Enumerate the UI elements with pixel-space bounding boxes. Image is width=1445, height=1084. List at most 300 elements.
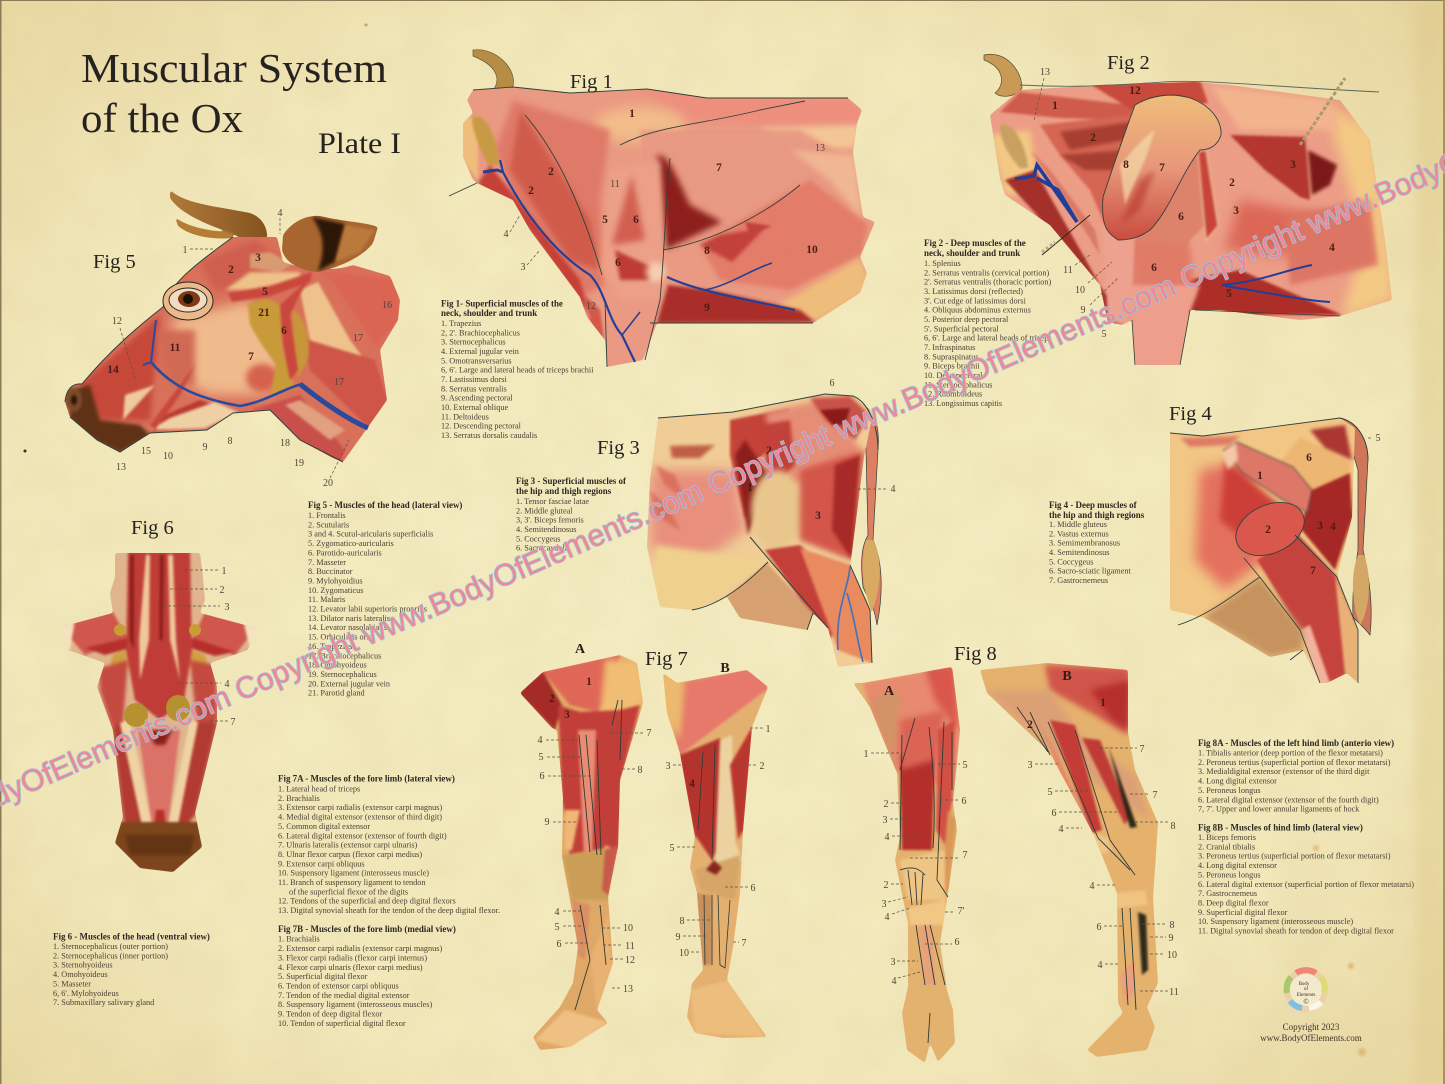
legend text: Fig 1: 7. Lastissimus dorsi: [441, 375, 507, 384]
legend text: Fig 8B: 8. Deep digital flexor: [1198, 898, 1269, 907]
figure 8: hind limb: [853, 643, 1179, 1063]
label: Fig 2: Fig 2: [1107, 52, 1150, 74]
figure 8 leader labels: 3: [882, 899, 886, 910]
legend text: Fig 5: Fig 5 - Muscles of the head (lateral view): [308, 500, 462, 510]
legend text: Fig 2: Fig 2 - Deep muscles of the: [924, 238, 1026, 248]
legend text: Fig 8A: 4. Long digital extensor: [1198, 777, 1277, 786]
figure 7 leader labels: 12: [625, 955, 635, 966]
legend text: Fig 1: 10. External oblique: [441, 403, 508, 412]
copyright text: [1260, 1022, 1362, 1043]
figure 4 labels: 3: [1317, 520, 1323, 532]
limb A painting: [520, 655, 645, 1050]
legend text: Fig 2: 2'. Serratus ventralis (thoracic portion): [924, 278, 1052, 287]
figure 5 labels: 8: [228, 436, 232, 447]
legend text: Fig 8B: 6. Lateral digital extensor (superficial portion of flexor metatarsi): [1198, 880, 1414, 889]
figure 8 leader labels: 10: [1167, 950, 1177, 961]
figure 2 labels: 8: [1123, 159, 1129, 171]
legend text: Fig 4: 3. Semimembranosus: [1049, 539, 1120, 548]
legend text: Fig 1: 3. Sternocephalicus: [441, 338, 506, 347]
figure 7 leader labels: 8: [638, 765, 642, 776]
label: Fig 6: Fig 6: [131, 517, 174, 539]
legend text: Fig 1: 11. Deltoideus: [441, 412, 489, 421]
legend text: Fig 8A: 2. Peroneus tertius (superficial portion of flexor metatarsi): [1198, 758, 1391, 767]
legend text: Fig 7A: Fig 7A - Muscles of the fore limb (lateral view): [278, 774, 455, 784]
figure 2 labels: 3: [1233, 205, 1239, 217]
labels: Fig 7, A, B: B: [720, 661, 730, 676]
legend text: Fig 7B: 5. Superficial digital flexor: [278, 972, 368, 981]
jugular vein: [143, 320, 368, 428]
legend text: Fig 5: 11. Malaris: [308, 595, 345, 604]
figure 3 labels: 1: [747, 482, 753, 494]
legend text: Fig 7A: 8. Ulnar flexor carpus (flexor carpi medius): [278, 850, 422, 859]
legend text: Fig 5: 18. Omohyoideus: [308, 661, 367, 670]
figure 7 leader labels: 8: [680, 916, 684, 927]
legend text: Fig 2: 3'. Cut edge of latissimus dorsi: [924, 296, 1027, 305]
legend text: Fig 1: Fig 1- Superficial muscles of the: [441, 298, 563, 308]
legend text: Fig 2: 11. Sternocephalicus: [924, 380, 992, 389]
legend text: Fig 2: 7. Infraspinatus: [924, 343, 975, 352]
labels: Fig 7, A, B: A: [575, 642, 586, 657]
figure 1 labels: 4: [504, 229, 508, 240]
legend text: Fig 2: 5. Posterior deep pectoral: [924, 315, 1009, 324]
legend text: Fig 5: 5. Zygomatico-auricularis: [308, 539, 394, 548]
figure 7 leader labels: 5: [670, 843, 674, 854]
legend text: Fig 2: 8. Supraspinatus: [924, 352, 979, 361]
figure 2 labels: 1: [1052, 100, 1058, 112]
muscle painting: [990, 80, 1395, 365]
figure 8 leader labels: 7': [958, 906, 965, 917]
label: Fig 3: Fig 3: [597, 437, 640, 459]
legend text: Fig 5: 1. Frontalis: [308, 511, 346, 520]
legend text: Fig 8A: 5. Peroneus longus: [1198, 786, 1261, 795]
figure 5 labels: 19: [294, 458, 304, 469]
legend text: Fig 8B: 3. Peroneus tertius (superficial portion of flexor metatarsi): [1198, 852, 1391, 861]
muscle painting: [60, 553, 258, 875]
logo: Body of Elements: ©: [1303, 998, 1309, 1006]
figure 7 leader labels: 13: [623, 984, 633, 995]
figure 8 leader labels: 4: [1090, 881, 1094, 892]
legend text: Fig 1: 8. Serratus ventralis: [441, 384, 507, 393]
legend text: Fig 2: 2. Serratus ventralis (cervical portion): [924, 268, 1050, 277]
legend text: Fig 7A: 6. Lateral digital extensor (extensor of fourth digit): [278, 831, 447, 840]
label: Fig 8: Fig 8: [954, 643, 997, 665]
figure 2 labels: 10: [1075, 285, 1085, 296]
figure 6 labels: 4: [224, 679, 230, 690]
legend text: Fig 4: the hip and thigh regions: [1049, 510, 1145, 520]
logo: Body of Elements: Body: [1299, 982, 1310, 987]
figure 7 leader labels: 11: [625, 941, 635, 952]
legend text: Fig 7B: Fig 7B - Muscles of the fore limb (medial view): [278, 924, 456, 934]
figure 8 leader labels: 1: [864, 749, 868, 760]
legend text: Fig 4: 4. Semitendinosus: [1049, 548, 1110, 557]
anatomy contour lines: [449, 87, 848, 367]
limb A: 2: [549, 693, 555, 705]
figure 4 labels: 5: [1376, 433, 1380, 444]
muscle painting: [463, 87, 875, 367]
figure 8 leader labels: 4: [1058, 824, 1064, 835]
legend text: Fig 2: 4. Obliquus abdominus externus: [924, 306, 1031, 315]
limb B: 2: [1027, 719, 1033, 731]
legend text: Fig 4: 2. Vastus externus: [1049, 529, 1109, 538]
figure 4 labels: 6: [1306, 452, 1312, 464]
legend text: Fig 8B: 4. Long digital extensor: [1198, 861, 1277, 870]
figure 8 leader labels: 6: [1052, 808, 1056, 819]
figure 8 leader labels: 5: [1048, 787, 1052, 798]
limb B: [980, 663, 1158, 1057]
legend text: Fig 5: 6. Parotido-auricularis: [308, 548, 382, 557]
muscle painting: [1170, 418, 1358, 683]
figure 7 leader labels: 9: [676, 932, 680, 943]
legend text: Fig 7A: 7. Ulnaris lateralis (extensor carpi ulnaris): [278, 841, 418, 850]
figure 7 leader labels: 6: [556, 939, 562, 950]
legend text: Fig 3: 1. Tensor fasciae latae: [516, 497, 589, 506]
legend text: Fig 5: 15. Orbicularis oris: [308, 633, 372, 642]
figure 8 leader labels: 11: [1169, 987, 1179, 998]
figure 1 labels: 7: [716, 162, 722, 174]
tail tuft: [1353, 555, 1369, 625]
shoulder blade: [1103, 95, 1221, 240]
horn: [473, 50, 513, 95]
legend text: Fig 5: 21. Parotid gland: [308, 689, 365, 698]
legend text: Fig 5: 8. Buccinator: [308, 567, 353, 576]
muscle 2: [1227, 492, 1313, 566]
label: Fig 5: Fig 5: [93, 251, 136, 273]
legend text: Fig 2: 5'. Superficial pectoral: [924, 324, 999, 333]
figure 7 leader labels: 4: [538, 735, 542, 746]
legend text: Fig 6: 5. Masseter: [53, 979, 91, 988]
legend text: Fig 7A: 3. Extensor carpi radialis (extensor carpi magnus): [278, 803, 443, 812]
legend text: Fig 1: 1. Trapezius: [441, 319, 481, 328]
figure 2 labels: 4: [1329, 242, 1335, 254]
figure 4 labels: 4: [1330, 521, 1336, 533]
figure 8 leader labels: 4: [884, 832, 890, 843]
figure 2 labels: 12: [1129, 85, 1141, 97]
figure 5 labels: 20: [323, 478, 333, 489]
figure 1 labels: [504, 108, 825, 314]
figure 5 labels: 3: [255, 252, 261, 264]
legend text: Fig 6: 3. Sternohyoideus: [53, 961, 113, 970]
figure 4 labels: [1257, 433, 1380, 577]
legend text: Fig 3: 3, 3'. Biceps femoris: [516, 516, 584, 525]
figure 8 leader labels: 7: [1140, 744, 1144, 755]
figure 5 labels: 6: [281, 325, 287, 337]
figure 3 labels: [747, 378, 896, 522]
figure 5 labels: 14: [107, 364, 119, 376]
figure 7 leader labels: [538, 724, 770, 995]
figure 1 labels: 3: [520, 262, 526, 273]
figure 8 leader labels: 4: [892, 976, 896, 987]
legend text: Fig 7A: 10. Suspensory ligament (interosseus muscle): [278, 869, 429, 878]
figure 7 leader labels: 7: [742, 938, 746, 949]
figure 5 labels: 7: [248, 351, 254, 363]
legend text: Fig 8A: 1. Tibialis anterior (deep portion of the flexor metatarsi): [1198, 748, 1383, 758]
figure 4: deep muscles of hip and thigh: [1169, 403, 1380, 683]
legend text: Fig 8A: 3. Medialdigital extensor (extensor of the third digit: [1198, 767, 1370, 776]
legend text: Fig 7B: 3. Flexor carpi radialis (flexor carpi internus): [278, 953, 427, 962]
legend text: Fig 6: 2. Sternocephalicus (inner portion): [53, 951, 168, 960]
figure 2 labels: 6: [1151, 262, 1157, 274]
figure 3 labels: 4: [890, 484, 896, 495]
figure 2 labels: 2: [1229, 177, 1235, 189]
figure 5: head lateral view: [65, 190, 400, 489]
legend text: Fig 5: 13. Dilator naris lateralis: [308, 614, 390, 623]
figure 1 labels: 12: [586, 301, 596, 312]
horn: [984, 54, 1022, 96]
legend text: Fig 5: 20. External jugular vein: [308, 679, 390, 688]
figure 1 labels: 5: [602, 214, 608, 226]
legend text: Fig 8B: Fig 8B - Muscles of hind limb (lateral view): [1198, 822, 1363, 832]
legend text: Fig 2: 12. Rhomboideus: [924, 390, 982, 399]
legend text: Fig 4: 1. Middle gluteus: [1049, 520, 1107, 529]
legend text: Fig 3: 2. Middle gluteal: [516, 506, 573, 515]
legend text: Fig 1: neck, shoulder and trunk: [441, 308, 537, 318]
figure 1 labels: 2: [548, 166, 554, 178]
figure 8 leader labels: 3: [1028, 760, 1032, 771]
limb A: 3: [564, 709, 570, 721]
figure 8 leader labels: [864, 744, 1179, 998]
figure 5 labels: 4: [278, 208, 282, 219]
legend text: Fig 5: 7. Masseter: [308, 558, 346, 567]
legend text: Fig 7A: 12. Tendons of the superficial and deep digital flexors: [278, 897, 456, 906]
figure 8 leader labels: 7: [962, 850, 968, 861]
limb B: 4: [689, 778, 695, 790]
figure 7 leader labels: 5: [538, 752, 544, 763]
legend text: Fig 5: 14. Levator nasolabialis: [308, 623, 387, 632]
title: Muscular System: [81, 45, 387, 91]
figure 1: superficial muscles of neck, shoulder and trunk: [449, 50, 875, 367]
legend text: Fig 7B: 10. Tendon of superficial digital flexor: [278, 1019, 406, 1028]
figure 6 labels: 3: [224, 602, 230, 613]
horns: [170, 190, 267, 241]
legend text: Fig 5: 16. Trapezius: [308, 642, 352, 651]
figure 8 leader labels: 6: [954, 937, 960, 948]
legend text: Fig 3: 4. Semitendinosus: [516, 525, 577, 534]
figure 5 labels: 2: [228, 264, 234, 276]
salivary glands: [114, 624, 201, 727]
legend text: Fig 2: 10. Deep pectoral: [924, 371, 983, 380]
tail: [1340, 418, 1371, 635]
label: Fig 4: Fig 4: [1169, 403, 1212, 425]
legend text: Fig 5: 3 and 4. Scutul-aricularis superficialis: [308, 530, 433, 539]
head muscle painting: [65, 237, 400, 462]
figure 4 labels: 1: [1257, 470, 1263, 482]
figure 5 labels: 18: [280, 438, 290, 449]
legend text: Fig 8B: 5. Peroneus longus: [1198, 870, 1261, 879]
tail: [862, 405, 881, 625]
legend text: Fig 6: Fig 6 - Muscles of the head (ventral view): [53, 932, 210, 942]
legend text: Fig 5: 2. Scutularis: [308, 520, 349, 529]
figure 4 labels: 2: [1265, 524, 1271, 536]
legend text: Fig 2: 9. Biceps brachii: [924, 362, 980, 371]
legend text: Fig 2: 6, 6'. Large and lateral heads of triceps: [924, 334, 1052, 343]
legend text: Fig 5: 10. Zygomaticus: [308, 586, 363, 595]
legend text: Fig 3: 6. Sacrocaudalis: [516, 544, 570, 553]
figure 1 labels: 11: [610, 179, 620, 190]
figure 7 leader labels: 9: [544, 817, 550, 828]
figure 5 labels: 10: [163, 451, 173, 462]
legend text: Fig 6: 4. Omohyoideus: [53, 970, 108, 979]
figure 5 labels: 15: [141, 446, 151, 457]
figure 2: deep muscles of neck, shoulder and trunk: [984, 52, 1395, 365]
legend text: Fig 4: 5. Coccygeus: [1049, 557, 1093, 566]
figure 2 labels: 5: [1102, 329, 1106, 340]
legend text: Fig 6: 7. Submaxillary salivary gland: [53, 998, 155, 1007]
title: [81, 45, 401, 160]
figure 1 labels: 6: [633, 214, 639, 226]
legend text: Fig 2: 3. Latissimus dorsi (reflected): [924, 287, 1023, 296]
figure 8 leader labels: 3: [882, 815, 888, 826]
tail tuft: [863, 540, 880, 612]
figure 5 labels: 16: [382, 300, 392, 311]
ear: [282, 216, 378, 272]
limb A painting: [853, 665, 960, 1063]
figure 8 leader labels: 8: [1170, 920, 1174, 931]
figure 7 leader labels: 10: [679, 948, 689, 959]
logo: Body of Elements: Elements: [1297, 993, 1315, 998]
legend text: Fig 5: 9. Mylohyoidius: [308, 576, 363, 585]
figure 8 leader labels: 3: [890, 957, 896, 968]
limb B: 1: [1100, 697, 1106, 709]
eye: [163, 282, 213, 320]
legend text: Fig 8A: 6. Lateral digital extensor (extensor of the fourth digit): [1198, 795, 1379, 804]
figure 2 labels: 13: [1040, 67, 1050, 78]
labels: Fig 7, A, B: [575, 642, 730, 676]
copyright text: www.BodyOfElements.com: [1260, 1033, 1362, 1043]
legend text: Fig 2: neck, shoulder and trunk: [924, 248, 1020, 258]
figure 1 labels: 13: [815, 143, 825, 154]
figure 7 leader labels: 5: [554, 922, 560, 933]
figure 3 labels: 3: [815, 510, 821, 522]
limb A: 1: [586, 676, 592, 688]
legend text: Fig 7B: 7. Tendon of the medial digital extensor: [278, 991, 410, 1000]
lines and veins: [1015, 78, 1379, 365]
legend text: Fig 6: 1. Sternocephalicus (outer portion): [53, 942, 168, 951]
limb B painting: [980, 663, 1158, 1057]
logo: Body of Elements: of: [1304, 987, 1308, 992]
figure 1 labels: 10: [806, 244, 818, 256]
figure 3: superficial muscles of hip and thigh: [597, 378, 896, 667]
vein: [838, 567, 863, 662]
legend text: Fig 3: the hip and thigh regions: [516, 486, 612, 496]
muscle painting: [647, 394, 873, 667]
legend text: Fig 7B: 2. Extensor carpi radialis (extensor carpi magnus): [278, 944, 443, 953]
legend text: Fig 1: 4. External jugular vein: [441, 347, 519, 356]
legend text: Fig 7B: 8. Suspensory ligament (interosseous muscles): [278, 1000, 432, 1009]
figure 6 labels: 1: [222, 566, 226, 577]
legend text: Fig 8A: Fig 8A - Muscles of the left hind limb (anterio view): [1198, 738, 1394, 748]
title: Plate I: [318, 127, 401, 160]
figure 4 labels: 7: [1310, 565, 1316, 577]
figure 7 leader labels: 2: [760, 761, 764, 772]
legend text: Fig 1: 13. Serratus dorsalis caudalis: [441, 431, 537, 440]
legend text: Fig 7A: of the superficial flexor of the digits: [289, 887, 408, 896]
figure 8 leader labels: 4: [884, 912, 890, 923]
legend text: Fig 5: 19. Sternocephalicus: [308, 670, 377, 679]
figure 6 labels: 2: [220, 585, 224, 596]
figure 8 leader labels: 8: [1170, 821, 1176, 832]
legend text: Fig 4: Fig 4 - Deep muscles of: [1049, 500, 1138, 510]
limb A: A: [884, 684, 895, 699]
legend text: Fig 2: 1. Splenius: [924, 259, 961, 268]
legend text: Fig 3: 5. Coccygeus: [516, 534, 560, 543]
logo: Body of Elements: [1284, 968, 1328, 1012]
vein: [483, 160, 795, 362]
figure 8 leader labels: 2: [884, 880, 888, 891]
legend text: Fig 7B: 4. Flexor carpi ulnaris (flexor carpi medius): [278, 963, 423, 972]
legend text: Fig 1: 6, 6'. Large and lateral heads of triceps brachii: [441, 366, 594, 375]
figure 7 leader labels: 7: [646, 728, 652, 739]
figure 2 labels: 6: [1178, 211, 1184, 223]
legend text: Fig 8B: 9. Superficial digital flexor: [1198, 908, 1288, 917]
figure 8 leader labels: 9: [1168, 933, 1174, 944]
title: of the Ox: [81, 95, 243, 141]
legend text: Fig 7A: 11. Branch of suspensory ligament to tendon: [278, 878, 425, 887]
figure 3 labels: 6: [830, 378, 834, 389]
legend text: Fig 8B: 11. Digital synovial sheath for tendon of deep digital flexor: [1198, 926, 1394, 936]
legend text: Fig 7B: 9. Tendon of deep digital flexor: [278, 1010, 382, 1018]
limb B: [660, 670, 770, 1038]
figure 2 labels: 3: [1290, 159, 1296, 171]
figure 2 labels: 2: [1090, 132, 1096, 144]
limb A: [520, 655, 645, 1050]
figure 5 labels: 17: [353, 333, 363, 344]
figure 6: head ventral view: [60, 517, 258, 875]
labels: Fig 7, A, B: Fig 7: [645, 648, 688, 670]
figure 2 labels: 5: [1226, 288, 1232, 300]
figure 7 leader labels: 3: [666, 761, 670, 772]
figure 2 labels: [1034, 67, 1335, 340]
legend text: Fig 7A: 1. Lateral head of triceps: [278, 784, 360, 794]
legend text: Fig 1: 9. Ascending pectoral: [441, 394, 513, 403]
figure 7 leader labels: 6: [540, 771, 544, 782]
legend text: Fig 8A: 7, 7'. Upper and lower annular ligaments of hock: [1198, 805, 1360, 814]
legend text: Fig 8B: 2. Cranial tibialis: [1198, 842, 1255, 851]
figure 7 leader labels: 6: [750, 883, 756, 894]
figure 5 labels: 11: [170, 342, 181, 354]
figure 8 leader labels: 2: [884, 799, 888, 810]
figure 3 labels: 2: [766, 445, 772, 457]
figure 6 labels: [163, 566, 236, 728]
legend text: Fig 7A: 5. Common digital extensor: [278, 822, 370, 831]
figure 1 labels: 9: [704, 302, 710, 314]
legend text: Fig 8B: 7. Gastrocnemeus: [1198, 889, 1257, 898]
limb B painting: [660, 670, 770, 1038]
legend text: Fig 8B: 1. Biceps femoris: [1198, 833, 1256, 842]
figure 5 labels: 12: [112, 316, 122, 327]
legend text: Fig 7B: 1. Brachialis: [278, 935, 320, 944]
figure 5 labels: 9: [202, 442, 208, 453]
legend text: Fig 8B: 10. Suspensory ligament (interosseous muscle): [1198, 917, 1353, 926]
figure 5 labels: 21: [258, 307, 270, 319]
figure 2 labels: 11: [1063, 265, 1073, 276]
limb B: B: [1062, 669, 1072, 684]
figure 7 leader labels: 4: [554, 907, 560, 918]
legend text: Fig 5: 12. Levator labii superioris proprius: [308, 604, 427, 614]
figure 8 leader labels: 6: [962, 796, 966, 807]
legend text: Fig 7A: 9. Extensor carpi obliquus: [278, 859, 365, 868]
legend text: Fig 6: 6, 6'. Mylohyoideus: [53, 989, 119, 998]
figure 5 labels: 17: [334, 377, 344, 388]
figure 7 leader labels: 1: [766, 724, 770, 735]
legend text: Fig 1: 5. Omotransversarius: [441, 356, 512, 365]
figure 2 labels: 7: [1159, 162, 1165, 174]
legend text: Fig 3: Fig 3 - Superficial muscles of: [516, 476, 627, 486]
legend text: Fig 7A: 4. Medial digital extensor (extensor of third digit): [278, 813, 442, 822]
figure 1 labels: 1: [629, 108, 635, 120]
figure 7 leader labels: 10: [623, 923, 633, 934]
figure 1 labels: 2: [528, 185, 534, 197]
legend text: Fig 1: 2, 2'. Brachiocephalicus: [441, 328, 520, 337]
